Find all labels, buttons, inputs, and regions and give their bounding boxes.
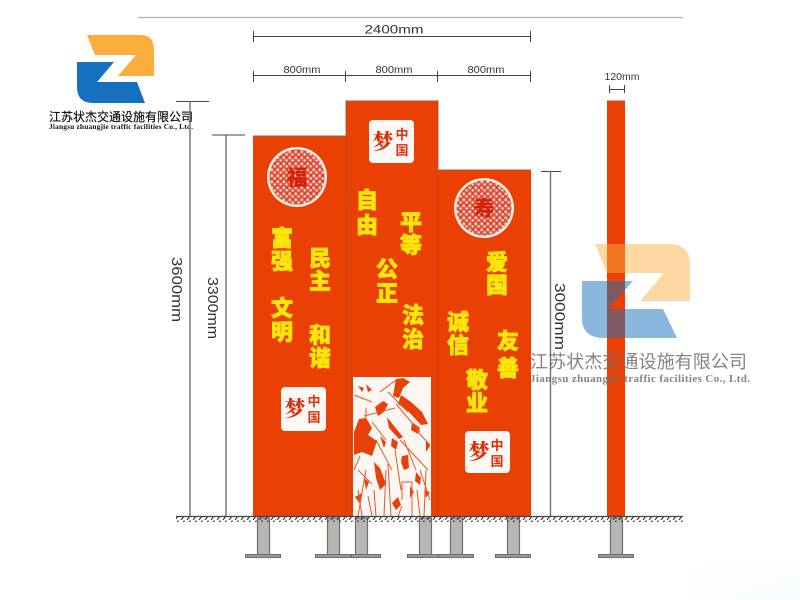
dimension: 3000mm: 3000mm <box>551 283 568 350</box>
logo mark blue <box>77 62 145 103</box>
support posts <box>246 518 634 558</box>
logo english name: Jiangsu zhuangjie traffic facilities Co., Ltd. <box>49 122 193 131</box>
dimension: 2400mm <box>254 24 530 42</box>
right medallion: 寿 <box>474 197 494 221</box>
right slogans: 敬 <box>466 368 488 393</box>
right slogans <box>447 250 519 416</box>
dimension: 800mm x 3: 800mm <box>468 65 504 76</box>
panel: left sign <box>253 136 346 516</box>
left slogans: 富 <box>271 226 293 251</box>
left medallion: 福 <box>286 167 308 190</box>
dimension: 800mm x 3: 800mm <box>284 65 320 76</box>
great wall papercut <box>353 377 431 516</box>
dimension: 2400mm: 2400mm <box>364 24 424 36</box>
center slogans: 由 <box>356 213 378 238</box>
right slogans: 业 <box>466 391 488 416</box>
faint corner tint <box>690 562 800 600</box>
left slogans: 民 <box>309 246 331 271</box>
center china dream tile <box>369 120 414 163</box>
ground line <box>176 516 683 522</box>
left slogans <box>271 226 331 371</box>
logo company name: 江苏状杰交通设施有限公司 <box>49 109 193 124</box>
dimension: 800mm x 3: 800mm <box>376 65 412 76</box>
right china dream tile: 梦 <box>468 440 490 464</box>
center sign board <box>346 101 438 516</box>
watermark company name: 江苏状杰交通设施有限公司 <box>530 352 747 372</box>
left china dream tile: 梦 <box>284 397 306 421</box>
left china dream tile <box>281 387 326 431</box>
center slogans: 平 <box>400 210 422 235</box>
center slogans: 正 <box>376 281 398 306</box>
dimension: 3600mm: 3600mm <box>168 257 185 322</box>
center china dream tile: 国 <box>395 143 409 158</box>
left slogans: 明 <box>271 320 293 345</box>
left china dream tile: 国 <box>307 410 321 425</box>
right sign board <box>438 170 531 516</box>
company logo <box>49 35 193 131</box>
left slogans: 和 <box>309 323 331 348</box>
dimension: 120mm <box>604 71 640 93</box>
right slogans: 信 <box>447 333 469 358</box>
logo mark orange <box>87 35 154 76</box>
watermark mark orange <box>595 244 690 301</box>
watermark english name: Jiangsu zhuangjie traffic facilities Co., Ltd. <box>530 373 750 385</box>
center slogans: 公 <box>376 257 398 282</box>
top rule <box>138 16 683 18</box>
side view pole <box>607 101 625 516</box>
panel: right sign <box>438 170 531 516</box>
center china dream tile: 梦 <box>372 130 394 154</box>
left china dream tile: 中 <box>307 394 321 409</box>
center slogans: 治 <box>402 327 424 352</box>
right slogans: 善 <box>497 356 519 381</box>
center slogans <box>356 188 424 352</box>
right china dream tile: 中 <box>490 438 504 453</box>
right china dream tile: 国 <box>490 454 504 469</box>
watermark mark blue <box>582 281 677 338</box>
center slogans: 法 <box>402 303 424 328</box>
left medallion <box>267 147 327 207</box>
left sign board <box>253 136 346 516</box>
left slogans: 谐 <box>309 346 331 371</box>
left slogans: 主 <box>309 269 331 294</box>
dimension: 120mm: 120mm <box>604 71 640 83</box>
left slogans: 文 <box>271 296 293 321</box>
watermark logo <box>530 244 750 385</box>
right slogans: 国 <box>486 273 508 298</box>
right slogans: 友 <box>497 329 519 354</box>
right medallion <box>454 178 514 238</box>
center slogans: 自 <box>356 188 378 213</box>
dimension: 3300mm: 3300mm <box>204 277 221 339</box>
right slogans: 诚 <box>447 310 469 335</box>
center slogans: 等 <box>400 233 422 258</box>
dimension: 800mm x 3 <box>254 65 530 82</box>
panel: center sign <box>346 101 438 516</box>
left slogans: 强 <box>271 249 293 274</box>
center china dream tile: 中 <box>395 127 409 142</box>
right china dream tile <box>465 431 510 473</box>
right slogans: 爱 <box>486 250 508 275</box>
